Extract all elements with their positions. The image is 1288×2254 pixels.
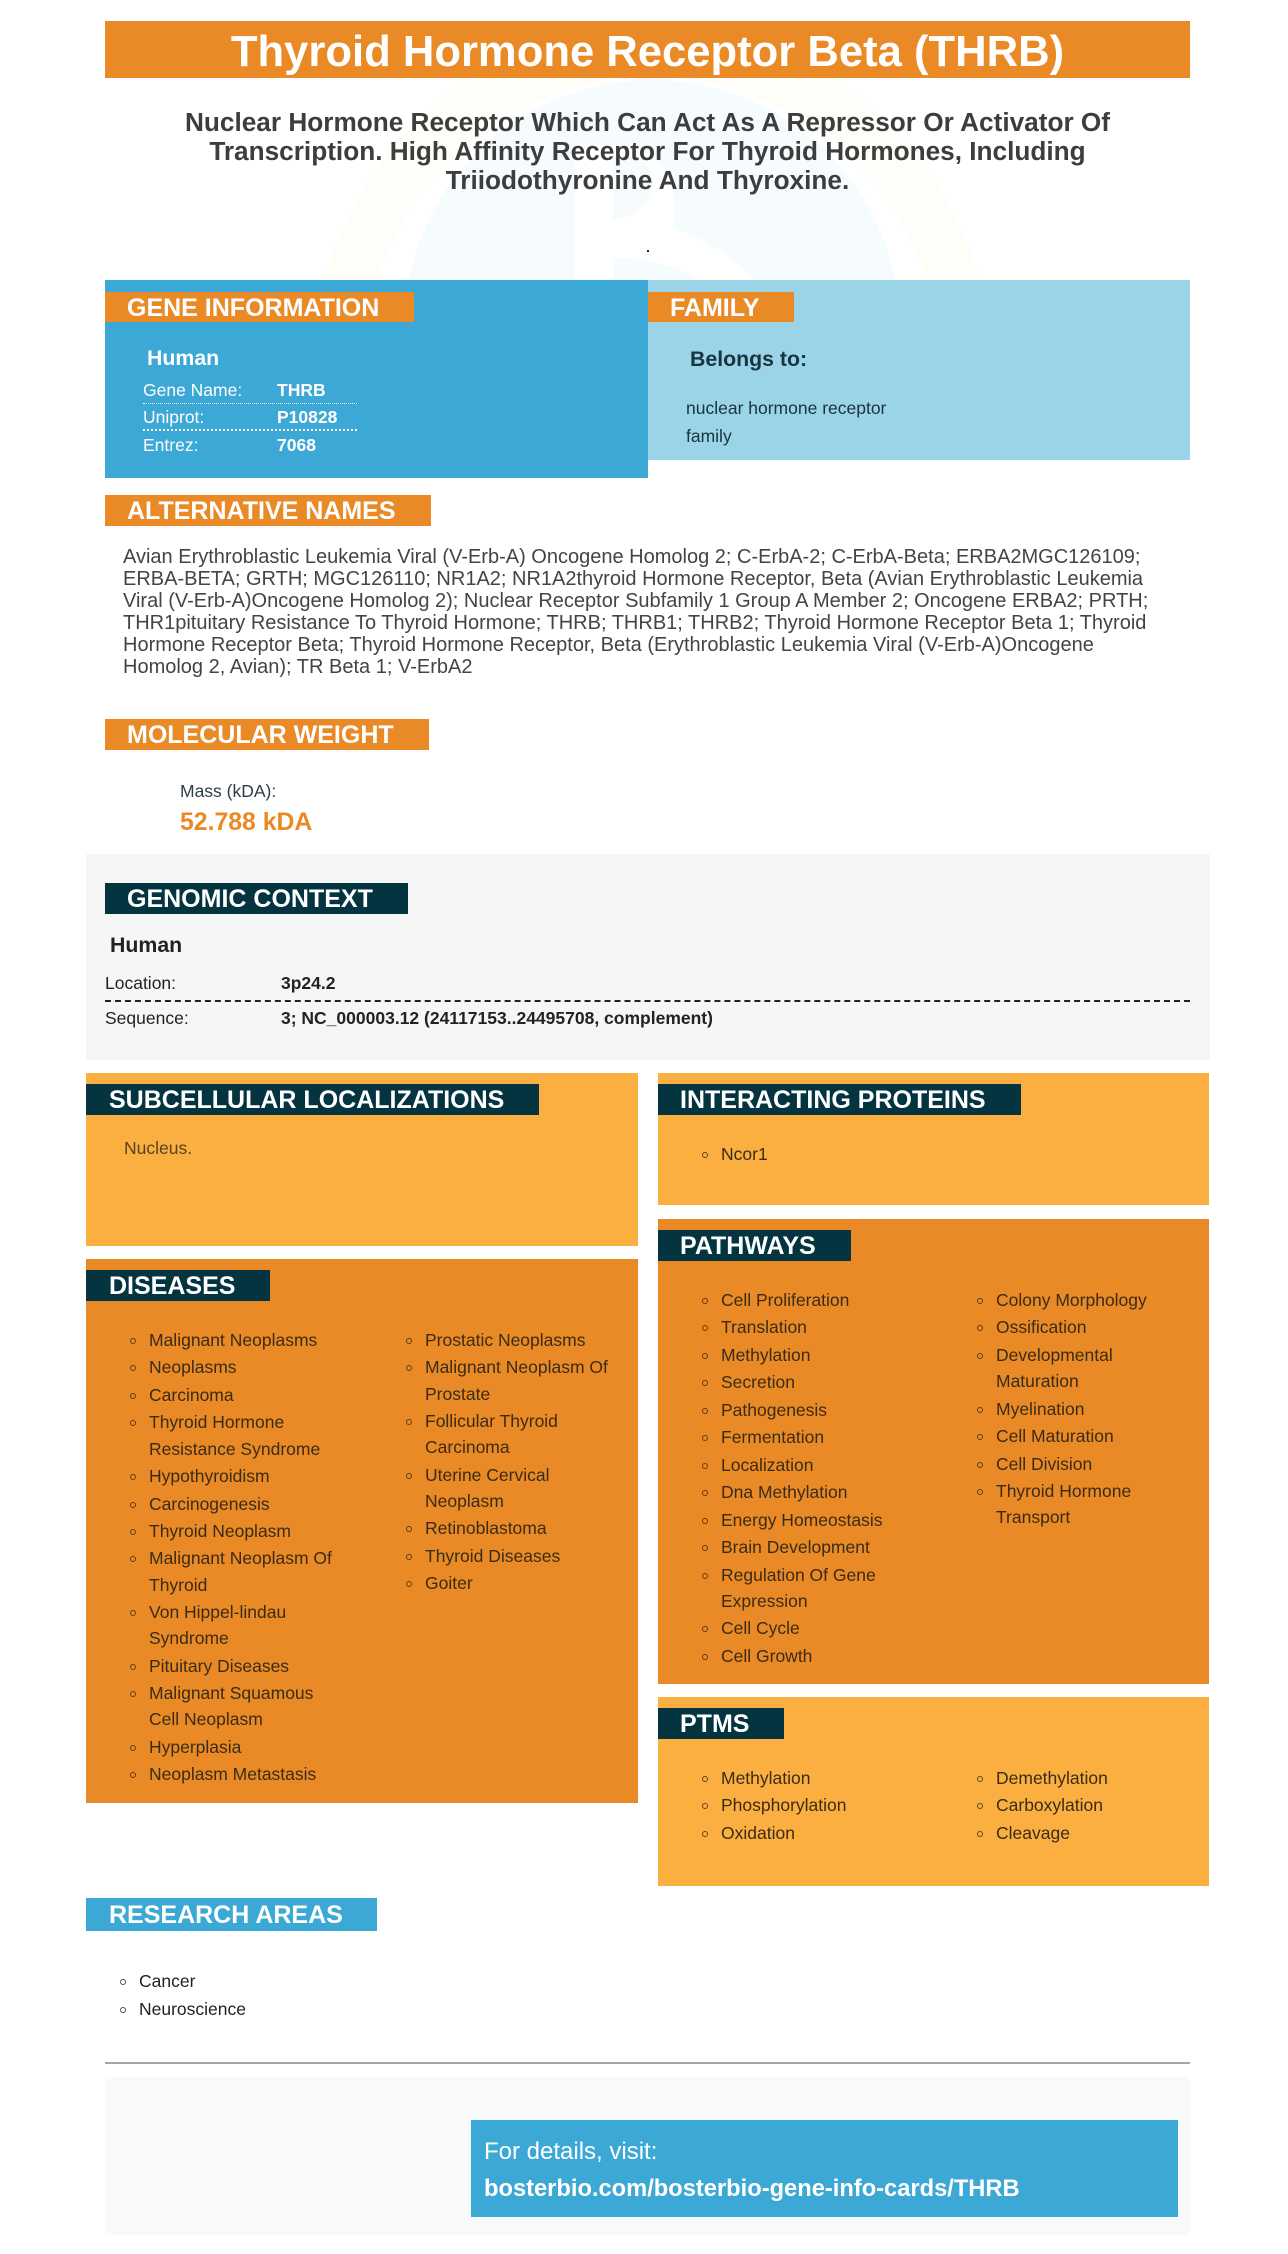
sequence row: Sequence: (105, 1008, 189, 1028)
disease list column 1: Hyperplasia (149, 1737, 241, 1757)
disease list column 1: Carcinoma (149, 1385, 234, 1405)
heading: ptms: PTMS (680, 1710, 749, 1738)
alternative names text: Viral (V-Erb-A)Oncogene Homolog 2); Nuclear Receptor Subfamily 1 Group A Member 2; Oncogene ERBA2; PRTH; (123, 590, 1148, 612)
alternative names text: Hormone Receptor Beta; Thyroid Hormone Receptor, Beta (Erythroblastic Leukemia Viral (V-Erb-A)Oncogene (123, 634, 1094, 656)
gene info table: Entrez: (143, 435, 198, 455)
ptm list column 2: Carboxylation (996, 1795, 1103, 1815)
gene info table: THRB (277, 380, 326, 400)
sequence row: 3; NC_000003.12 (24117153..24495708, complement) (281, 1008, 713, 1028)
panel: subcellular localizations (86, 1073, 638, 1246)
alternative names text: Homolog 2, Avian); TR Beta 1; V-ErbA2 (123, 656, 472, 678)
ptm list column 2: Demethylation (996, 1768, 1108, 1788)
alternative names text: ERBA-BETA; GRTH; MGC126110; NR1A2; NR1A2thyroid Hormone Receptor, Beta (Avian Erythroblastic Leukemia (123, 568, 1143, 590)
alternative names text: Avian Erythroblastic Leukemia Viral (V-Erb-A) Oncogene Homolog 2; C-ErbA-2; C-ErbA-Beta; ERBA2MGC126109; (123, 546, 1140, 568)
gene info table: Uniprot: (143, 407, 204, 427)
pathway list column 1: Cell Cycle (721, 1618, 800, 1638)
disease list column 1: Thyroid Neoplasm (149, 1521, 291, 1541)
disease list column 1: Carcinogenesis (149, 1494, 270, 1514)
disease list column 2: Retinoblastoma (425, 1518, 547, 1538)
disease list column 2: Malignant Neoplasm Of Prostate (425, 1357, 608, 1404)
localization text: Nucleus. (124, 1138, 192, 1158)
heading: genomic context: GENOMIC CONTEXT (127, 885, 373, 913)
pathway list column 2: Thyroid Hormone Transport (996, 1481, 1131, 1527)
heading: pathways: PATHWAYS (680, 1232, 816, 1260)
pathway list column 1: Cell Proliferation (721, 1290, 849, 1310)
pathway list column 2: Cell Division (996, 1454, 1092, 1474)
panel: diseases (86, 1259, 638, 1803)
subtitle description (185, 107, 1110, 195)
pathway list column 1: Brain Development (721, 1537, 870, 1557)
pathway list column 1: Methylation (721, 1345, 810, 1365)
pathway list column 2: Colony Morphology (996, 1290, 1147, 1310)
belongs to label: Belongs to: (690, 347, 807, 371)
heading: interacting proteins: INTERACTING PROTEINS (680, 1086, 986, 1114)
ptm list column 2: Cleavage (996, 1823, 1070, 1843)
panel: family (648, 280, 1190, 460)
heading: family: FAMILY (670, 294, 759, 322)
disease list column 1 (130, 1330, 332, 1784)
species label: Human (147, 346, 219, 370)
alternative names text: THR1pituitary Resistance To Thyroid Hormone; THRB; THRB1; THRB2; Thyroid Hormone Receptor Beta 1; Thyroid (123, 612, 1146, 634)
heading: subcellular localizations: SUBCELLULAR LOCALIZATIONS (109, 1086, 504, 1114)
heading: research areas (86, 1898, 377, 1931)
ptm list column 1: Phosphorylation (721, 1795, 846, 1815)
gene info table: Gene Name: (143, 380, 242, 400)
ptm list column 2 (977, 1768, 1108, 1843)
disease list column 1: Malignant Neoplasms (149, 1330, 317, 1350)
pathway list column 1: Regulation Of Gene Expression (721, 1565, 876, 1611)
disease list column 2: Thyroid Diseases (425, 1546, 560, 1566)
pathway list column 2: Cell Maturation (996, 1426, 1114, 1446)
species label: Human (110, 933, 182, 957)
heading: ptms (658, 1708, 784, 1739)
panel: ptms (658, 1697, 1209, 1886)
disease list column 2: Uterine Cervical Neoplasm (425, 1465, 549, 1511)
pathway list column 1: Cell Growth (721, 1646, 812, 1666)
pathway list column 1: Fermentation (721, 1427, 824, 1447)
pathway list column 2: Ossification (996, 1317, 1086, 1337)
subtitle description: Nuclear Hormone Receptor Which Can Act As A Repressor Or Activator Of (185, 107, 1110, 137)
pathway list column 1: Translation (721, 1317, 807, 1337)
ptm list column 1: Oxidation (721, 1823, 795, 1843)
mass value: 52.788 kDA (180, 809, 312, 836)
disease list column 1: Neoplasms (149, 1357, 237, 1377)
disease list column 2: Prostatic Neoplasms (425, 1330, 585, 1350)
family text: family (686, 426, 732, 446)
callout: details link (471, 2120, 1178, 2217)
disease list column 1: Neoplasm Metastasis (149, 1764, 316, 1784)
heading: gene information: GENE INFORMATION (127, 294, 379, 322)
disease list column 2: Follicular Thyroid Carcinoma (425, 1411, 558, 1457)
pathway list column 2: Myelination (996, 1399, 1085, 1419)
panel: genomic context (86, 854, 1210, 1060)
title banner (105, 21, 1190, 78)
panel: gene information (105, 280, 648, 478)
protein list: Ncor1 (721, 1144, 768, 1164)
location row: 3p24.2 (281, 973, 335, 993)
heading: molecular weight: MOLECULAR WEIGHT (127, 721, 394, 749)
heading: diseases (86, 1270, 270, 1301)
location row (105, 973, 335, 993)
panel: footer (105, 2077, 1190, 2235)
ptm list column 1: Methylation (721, 1768, 810, 1788)
pathway list column 2 (977, 1290, 1147, 1527)
heading: research areas: RESEARCH AREAS (109, 1901, 343, 1929)
small dot (647, 250, 649, 252)
disease list column 2 (406, 1330, 608, 1593)
mass label: Mass (kDA): (180, 781, 276, 801)
background watermark logo (409, 80, 895, 280)
pathway list column 1: Dna Methylation (721, 1482, 847, 1502)
pathway list column 1 (702, 1290, 882, 1666)
research areas list: Cancer (139, 1971, 195, 1991)
pathway list column 1: Secretion (721, 1372, 795, 1392)
pathway list column 1: Localization (721, 1455, 813, 1475)
gene info table: P10828 (277, 407, 337, 427)
family text: nuclear hormone receptor (686, 398, 886, 418)
heading: pathways (658, 1230, 851, 1261)
pathway list column 2: Developmental Maturation (996, 1345, 1113, 1391)
family text (686, 398, 886, 446)
pathway list column 1: Pathogenesis (721, 1400, 827, 1420)
heading: diseases: DISEASES (109, 1272, 235, 1300)
subtitle description: Transcription. High Affinity Receptor For Thyroid Hormones, Including (209, 136, 1086, 166)
disease list column 1: Hypothyroidism (149, 1466, 270, 1486)
disease list column 1: Malignant Squamous Cell Neoplasm (149, 1683, 313, 1729)
disease list column 1: Von Hippel-lindau Syndrome (149, 1602, 286, 1648)
panel: interacting proteins (658, 1073, 1209, 1205)
subtitle description: Triiodothyronine And Thyroxine. (446, 165, 849, 195)
panel: pathways (658, 1219, 1209, 1684)
disease list column 1: Thyroid Hormone Resistance Syndrome (149, 1412, 320, 1459)
heading: alternative names: ALTERNATIVE NAMES (127, 497, 396, 525)
gene info table (143, 380, 357, 455)
ptm list column 1 (702, 1768, 846, 1843)
research areas list (120, 1971, 246, 2019)
location row: Location: (105, 973, 176, 993)
title banner: Thyroid Hormone Receptor Beta (THRB) (231, 28, 1064, 76)
gene info table: 7068 (277, 435, 316, 455)
disease list column 1: Pituitary Diseases (149, 1656, 289, 1676)
disease list column 1: Malignant Neoplasm Of Thyroid (149, 1548, 332, 1595)
heading: family (648, 292, 794, 322)
disease list column 2: Goiter (425, 1573, 473, 1593)
details label: For details, visit: (484, 2138, 657, 2165)
alternative names text (123, 546, 1148, 678)
pathway list column 1: Energy Homeostasis (721, 1510, 882, 1530)
research areas list: Neuroscience (139, 1999, 246, 2019)
details url: bosterbio.com/bosterbio-gene-info-cards/THRB (484, 2176, 1020, 2202)
